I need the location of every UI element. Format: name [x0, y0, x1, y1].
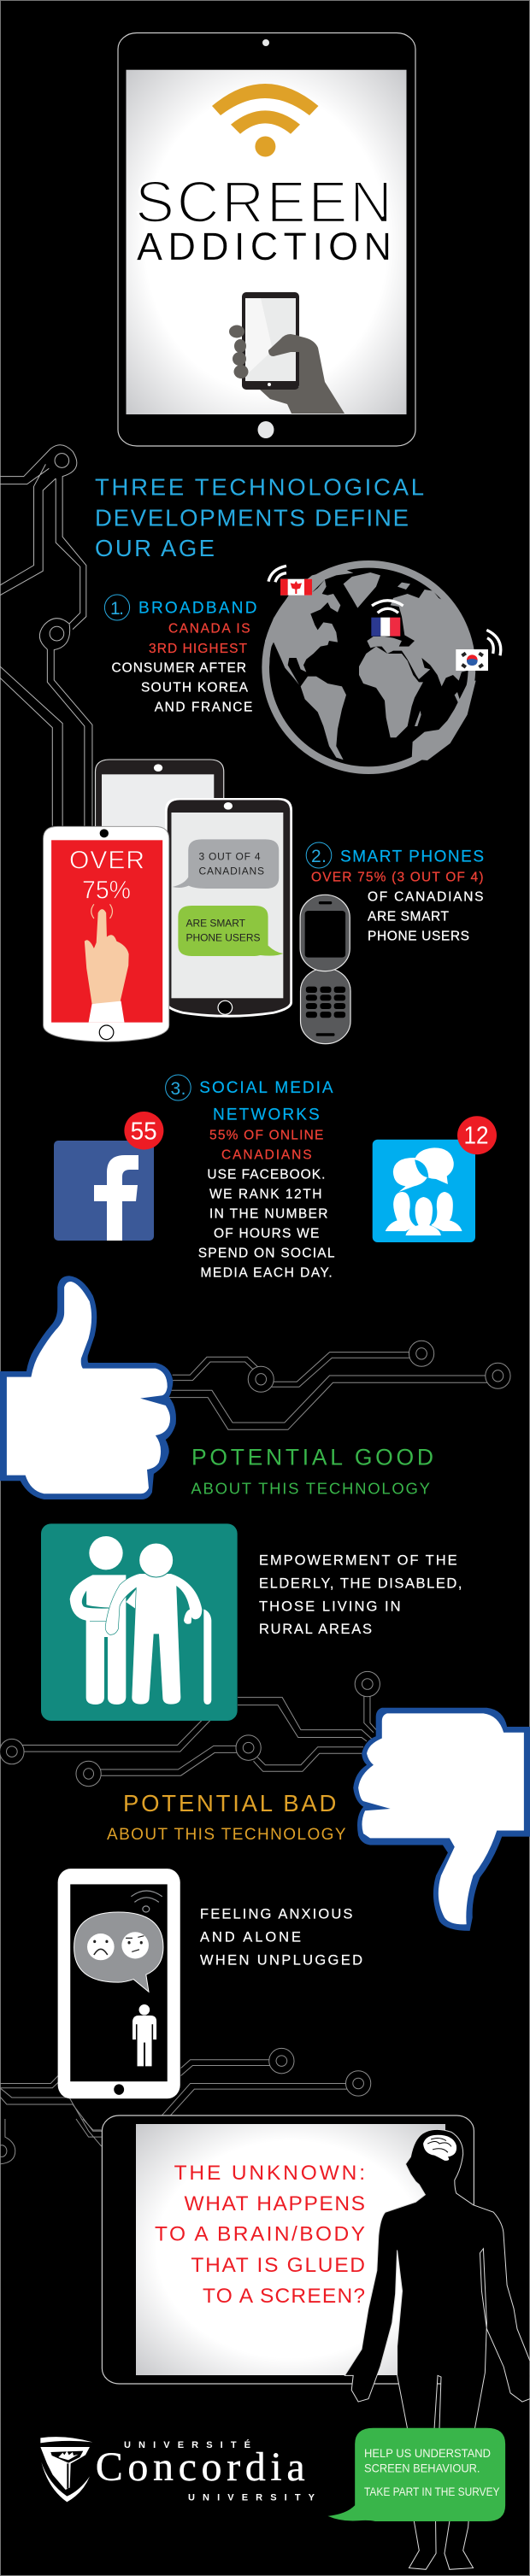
red phone text: over 75% — [69, 847, 144, 905]
icon: elderly and caregiver — [41, 1523, 238, 1721]
gray bubble text: 3 OUT OF 4 — [198, 851, 261, 863]
broadband stat — [149, 622, 250, 656]
social media description: IN THE NUMBER — [209, 1207, 328, 1222]
text block: empowerment: RURAL AREAS — [259, 1622, 372, 1637]
text block: empowerment — [259, 1552, 462, 1637]
back tablet — [96, 760, 224, 837]
worried face — [121, 1932, 149, 1958]
survey text: TAKE PART IN THE SURVEY — [364, 2485, 500, 2498]
tablet home button — [258, 421, 274, 438]
globe with flags — [263, 564, 501, 771]
text block: feeling anxious — [200, 1907, 362, 1969]
smart phones heading: SMART PHONES — [340, 848, 484, 866]
text block: feeling anxious: FEELING ANXIOUS — [200, 1907, 352, 1922]
heading: three technological developments: OUR AGE — [95, 535, 215, 561]
panel: the unknown tablet — [102, 2115, 474, 2384]
circuit lines: upper left — [0, 445, 92, 826]
tablet screen — [127, 70, 407, 414]
globe ring — [266, 564, 472, 771]
survey text: SCREEN BEHAVIOUR. — [364, 2462, 480, 2475]
middle smartphone — [165, 798, 292, 1018]
notification badge 55 — [124, 1112, 163, 1150]
social media heading: NETWORKS — [213, 1106, 320, 1124]
icon: brain — [423, 2135, 456, 2161]
three people — [386, 1192, 415, 1231]
flag: France — [371, 618, 400, 637]
the unknown question: THAT IS GLUED — [191, 2254, 365, 2277]
icon: group chat — [373, 1116, 497, 1242]
broadband description: SOUTH KOREA — [141, 680, 249, 695]
red phone text: over 75%: OVER — [69, 847, 144, 875]
body — [344, 2129, 530, 2569]
the unknown question: WHAT HAPPENS — [185, 2192, 365, 2215]
the unknown question — [155, 2162, 365, 2308]
wordmark: UNIVERSITÉ — [124, 2439, 250, 2450]
title: screen addiction: ADDICTION — [137, 225, 392, 268]
the unknown question: THE UNKNOWN: — [174, 2162, 365, 2185]
heading: potential good: POTENTIAL GOOD — [191, 1444, 433, 1470]
broadband description — [111, 661, 252, 714]
broadband stat: 3RD HIGHEST — [149, 642, 248, 656]
devices illustration — [44, 760, 350, 1044]
tablet frame — [118, 32, 415, 446]
number badge 3 — [166, 1075, 191, 1100]
title: screen addiction: SCREEN — [135, 169, 392, 235]
bottom tablet screen — [136, 2124, 445, 2375]
the unknown question: TO A SCREEN? — [203, 2285, 365, 2308]
social media heading — [199, 1079, 333, 1124]
tablet camera — [262, 39, 269, 46]
text block: broadband — [104, 595, 257, 714]
continents — [263, 568, 476, 760]
gray bubble text: CANADIANS — [198, 865, 264, 877]
wordmark university: UNIVERSITY — [188, 2493, 315, 2503]
heading: three technological developments: DEVELOPMENTS DEFINE — [95, 504, 409, 531]
heading: potential bad: POTENTIAL BAD — [123, 1790, 336, 1816]
panel: hero tablet — [118, 32, 415, 446]
social media description: OF HOURS WE — [214, 1226, 319, 1241]
wifi outline — [131, 1891, 162, 1912]
text block: smart phones — [306, 842, 484, 944]
number badge 1: 1. — [110, 599, 124, 619]
icon: phone with sad faces — [58, 1869, 180, 2098]
social media heading: SOCIAL MEDIA — [199, 1079, 333, 1097]
circuit lines: lower left — [0, 2119, 102, 2164]
social media stat: CANADIANS — [221, 1148, 312, 1163]
number badge 2 — [306, 842, 332, 868]
notification badge 12: 12 — [463, 1122, 489, 1149]
smart phones description — [368, 890, 484, 944]
flag: South Korea — [456, 649, 488, 671]
broadband description: CONSUMER AFTER — [111, 661, 246, 676]
social media description: WE RANK 12TH — [209, 1188, 321, 1202]
text block: empowerment: EMPOWERMENT OF THE — [259, 1552, 457, 1568]
number badge 2: 2. — [311, 847, 327, 866]
broadband stat: CANADA IS — [168, 622, 250, 637]
phone screen — [70, 1884, 168, 2081]
text block: empowerment: ELDERLY, THE DISABLED, — [259, 1576, 462, 1592]
notification badge 55: 55 — [131, 1118, 157, 1145]
callout: survey bubble — [328, 2428, 505, 2521]
icon: flip phone — [300, 895, 350, 1044]
caregiver — [70, 1536, 126, 1705]
number badge 1 — [104, 595, 130, 620]
human body silhouette with brain — [344, 2129, 530, 2569]
text block: feeling anxious: AND ALONE — [200, 1929, 301, 1945]
icon: wifi arcs on flags — [268, 566, 501, 655]
icon: thumbs down — [353, 1708, 530, 1931]
teal box — [41, 1523, 238, 1721]
social media description: USE FACEBOOK. — [207, 1168, 325, 1182]
title: screen addiction — [135, 169, 392, 268]
social media description — [198, 1168, 335, 1280]
icon: pointing hand — [85, 904, 129, 1023]
phone home button — [114, 2084, 124, 2095]
icon: thumbs up — [0, 1276, 176, 1499]
number badge 3: 3. — [171, 1079, 186, 1099]
logo: Concordia University — [40, 2437, 315, 2503]
text block: social media networks — [166, 1075, 335, 1280]
subheading: about this technology gold: ABOUT THIS TECHNOLOGY — [107, 1826, 346, 1844]
broadband description: AND FRANCE — [155, 700, 252, 714]
survey text — [364, 2446, 500, 2498]
smart phones description: ARE SMART — [368, 910, 450, 924]
text block: feeling anxious: WHEN UNPLUGGED — [200, 1953, 362, 1969]
crest — [40, 2437, 92, 2502]
social media stat: 55% OF ONLINE — [209, 1129, 323, 1143]
subheading: about this technology green: ABOUT THIS TECHNOLOGY — [191, 1479, 430, 1497]
smart phones description: OF CANADIANS — [368, 890, 484, 905]
small person — [132, 2004, 156, 2066]
phone frame — [58, 1869, 180, 2098]
broadband heading: BROADBAND — [138, 599, 256, 617]
social media stat — [209, 1129, 323, 1163]
wordmark Concordia: Concordia — [96, 2444, 305, 2490]
green bubble text — [186, 917, 260, 943]
gray bubble text — [198, 851, 264, 877]
heading: three technological developments — [95, 473, 424, 561]
gray speech bubble — [173, 839, 279, 889]
speech bubble — [74, 1912, 163, 1992]
green bubble text: PHONE USERS — [186, 931, 260, 943]
green bubble text: ARE SMART — [186, 917, 246, 929]
bubble shape — [328, 2428, 505, 2521]
flag: Canada — [280, 579, 312, 596]
bottom tablet frame — [102, 2115, 474, 2384]
circuit lines: thumb up — [168, 1341, 510, 1429]
social media description: SPEND ON SOCIAL — [198, 1246, 335, 1260]
elderly person with cane — [105, 1543, 211, 1705]
text block: empowerment: THOSE LIVING IN — [259, 1599, 401, 1614]
icon: gold wifi — [212, 84, 318, 157]
the unknown question: TO A BRAIN/BODY — [155, 2223, 365, 2246]
icon: facebook — [54, 1112, 163, 1241]
front red phone — [44, 826, 169, 1042]
circuit lines: thumb down and teal box — [0, 1671, 380, 2146]
survey text: HELP US UNDERSTAND — [364, 2446, 491, 2460]
heading: three technological developments: THREE TECHNOLOGICAL — [95, 473, 424, 500]
smart phones description: PHONE USERS — [368, 930, 469, 944]
sad face — [87, 1933, 115, 1960]
social media description: MEDIA EACH DAY. — [200, 1265, 333, 1280]
green speech bubble — [178, 906, 283, 956]
notification badge 12 — [457, 1116, 497, 1154]
red phone text: over 75%: 75% — [82, 877, 131, 905]
icon: hand holding smartphone — [229, 292, 344, 414]
smart phones stat: OVER 75% (3 OUT OF 4) — [311, 871, 484, 885]
